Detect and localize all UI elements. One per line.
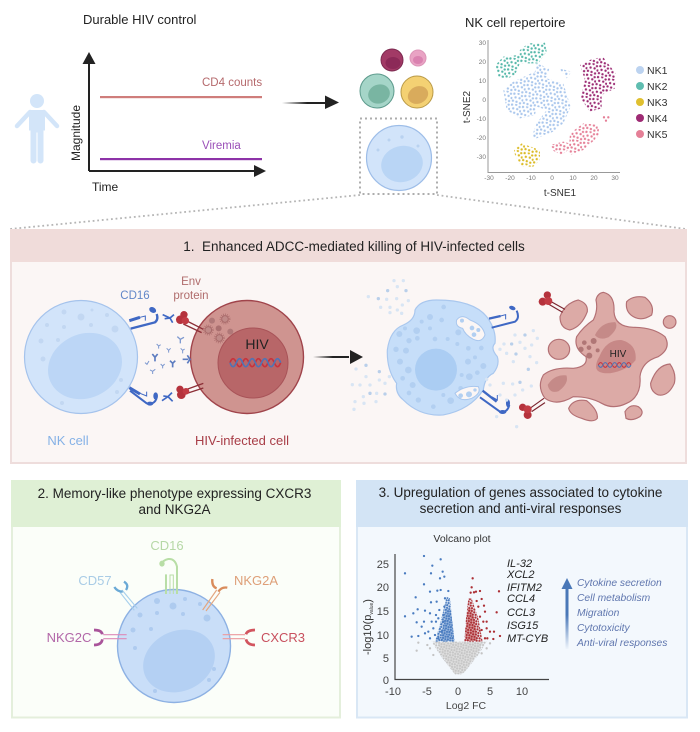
cell: NK cell bbox=[24, 300, 138, 414]
cell: lysed HIV-infected cell bbox=[540, 292, 676, 421]
label: NKG2C: NKG2C bbox=[47, 630, 91, 645]
chart: t-SNE scatter: -10 bbox=[526, 175, 536, 182]
arrow: killing progression bbox=[313, 350, 363, 364]
text block: upregulated pathways: Migration bbox=[577, 608, 620, 619]
chart: volcano plot: value bbox=[369, 602, 375, 615]
chart: volcano plot bbox=[362, 554, 549, 712]
cell: HIV-infected cell bbox=[190, 300, 304, 414]
chart: volcano plot: 10 bbox=[516, 686, 528, 698]
heading: NK cell repertoire: NK cell repertoire bbox=[465, 15, 565, 30]
panel 1: ADCC killing bbox=[10, 229, 687, 463]
zoom guide lines bbox=[10, 195, 686, 229]
chart: t-SNE scatter: 0 bbox=[482, 97, 486, 104]
chart: t-SNE scatter: 20 bbox=[590, 175, 598, 182]
chart: t-SNE scatter: -20 bbox=[505, 175, 515, 182]
chart: t-SNE scatter: -30 bbox=[484, 175, 494, 182]
chart: t-SNE scatter: 30 bbox=[611, 175, 619, 182]
chart: volcano plot: 10 bbox=[377, 630, 389, 642]
line chart: magnitude over time: CD4 counts bbox=[202, 77, 262, 89]
legend: NK clusters: NK2 bbox=[647, 81, 668, 93]
cell: NK cell with receptors bbox=[118, 590, 230, 704]
legend: NK clusters: NK1 bbox=[647, 65, 668, 77]
receptor: CD57 bbox=[114, 582, 137, 610]
heading: panel 2: and NKG2A bbox=[138, 502, 211, 517]
chart: volcano plot: -10 bbox=[385, 686, 401, 698]
text block: upregulated gene names bbox=[506, 558, 548, 645]
line chart: magnitude over time: Magnitude bbox=[69, 105, 83, 161]
chart: t-SNE scatter bbox=[462, 40, 620, 199]
chart: volcano plot: Log2 FC bbox=[446, 700, 487, 712]
text block: upregulated gene names: IL-32 bbox=[507, 558, 532, 570]
text: HIV label in nucleus: HIV bbox=[245, 336, 269, 352]
Env spikes bbox=[176, 311, 203, 399]
label: NK cell: NK cell bbox=[47, 433, 89, 448]
text block: upregulated gene names: ISG15 bbox=[507, 620, 539, 632]
panel 3: gene upregulation bbox=[356, 480, 688, 718]
icon: person bbox=[17, 94, 57, 164]
text block: upregulated pathways bbox=[576, 578, 667, 649]
chart: volcano plot: 15 bbox=[377, 606, 389, 618]
text block: upregulated gene names: IFITM2 bbox=[507, 582, 542, 594]
line chart: magnitude over time: Time bbox=[92, 180, 119, 194]
chart: t-SNE scatter: 10 bbox=[479, 78, 486, 85]
text block: upregulated pathways: Anti-viral responses bbox=[576, 638, 667, 649]
arrow: increasing expression bbox=[562, 578, 572, 649]
chart: volcano plot: 25 bbox=[377, 559, 389, 571]
chart: t-SNE scatter: t-SNE2 bbox=[462, 90, 473, 123]
label: CD16: CD16 bbox=[150, 538, 184, 553]
chart: t-SNE scatter: 20 bbox=[479, 59, 486, 66]
text: HIV label in lysed cell: HIV bbox=[610, 349, 627, 360]
icon: HIV DNA helix bbox=[230, 359, 281, 367]
receptors: Env spikes on lysed cell bbox=[519, 291, 565, 419]
chart: t-SNE scatter: -20 bbox=[477, 135, 486, 142]
chart: t-SNE scatter: -30 bbox=[477, 154, 486, 161]
receptors: CD16 with antibodies bound to Env bbox=[129, 306, 203, 406]
legend: NK clusters bbox=[636, 65, 668, 141]
label: HIV-infected cell: HIV-infected cell bbox=[195, 433, 289, 448]
chart: volcano plot: 20 bbox=[377, 582, 389, 594]
cell: degranulating NK cell bbox=[387, 300, 498, 415]
chart: volcano plot: 5 bbox=[487, 686, 493, 698]
top CD16 bbox=[129, 306, 174, 329]
heading: panel 3: secretion and anti-viral responses bbox=[420, 501, 622, 516]
heading: durable HIV control: Durable HIV control bbox=[83, 12, 197, 27]
panel 2: memory-like phenotype bbox=[11, 480, 341, 718]
receptor: CXCR3 bbox=[223, 630, 255, 645]
chart: volcano plot: -log10(p bbox=[362, 615, 374, 655]
chart: volcano plot: 0 bbox=[455, 686, 461, 698]
receptor: NKG2A bbox=[203, 579, 227, 611]
chart: volcano plot: ) bbox=[362, 599, 374, 603]
particles: released granules bbox=[352, 281, 537, 427]
label: CD57: CD57 bbox=[78, 573, 112, 588]
free antibodies bbox=[145, 337, 190, 374]
receptor: CD16 bbox=[159, 559, 177, 594]
receptor: NKG2C bbox=[94, 630, 127, 645]
heading: panel 1: 1. Enhanced ADCC-mediated killing of HIV-infected cells bbox=[183, 239, 525, 254]
panel 3 header bbox=[356, 480, 688, 527]
receptors: CD16 on degranulating NK cell bbox=[480, 305, 518, 414]
chart: volcano plot: 5 bbox=[383, 653, 389, 665]
label: CD16: CD16 bbox=[120, 290, 150, 302]
arrow: to NK cell repertoire bbox=[282, 96, 339, 109]
chart: t-SNE scatter: 10 bbox=[569, 175, 577, 182]
label: volcano plot title: Volcano plot bbox=[433, 533, 491, 545]
panel 1 header bbox=[10, 229, 687, 262]
icon: virus particles bbox=[204, 314, 233, 343]
text block: upregulated gene names: MT-CYB bbox=[507, 633, 548, 645]
chart: volcano plot: 0 bbox=[383, 675, 389, 687]
bottom CD16 bbox=[129, 388, 173, 406]
label: CXCR3: CXCR3 bbox=[261, 630, 305, 645]
chart: volcano plot: -5 bbox=[422, 686, 432, 698]
chart: t-SNE scatter: 30 bbox=[479, 40, 486, 47]
text block: upregulated gene names: XCL2 bbox=[506, 569, 535, 581]
icon: highlighted NK cell in dotted box bbox=[360, 118, 437, 194]
chart: t-SNE scatter: -10 bbox=[477, 116, 486, 123]
icon: NK cell subsets bbox=[360, 49, 433, 108]
text block: upregulated pathways: Cytotoxicity bbox=[577, 623, 630, 634]
heading: panel 2: 2. Memory-like phenotype expressing CXCR3 bbox=[38, 486, 311, 501]
label: Env protein: Env bbox=[181, 276, 201, 288]
text block: upregulated gene names: CCL4 bbox=[507, 593, 535, 605]
label: NKG2A: NKG2A bbox=[234, 573, 278, 588]
panel 2 header bbox=[11, 480, 341, 527]
legend: NK clusters: NK3 bbox=[647, 97, 668, 109]
text block: upregulated gene names: CCL3 bbox=[507, 607, 536, 619]
line chart: magnitude over time bbox=[69, 52, 266, 194]
legend: NK clusters: NK4 bbox=[647, 113, 668, 125]
icon: HIV DNA fragment bbox=[598, 363, 631, 367]
legend: NK clusters: NK5 bbox=[647, 129, 668, 141]
heading: panel 3: 3. Upregulation of genes associated to cytokine bbox=[379, 485, 662, 500]
line chart: magnitude over time: Viremia bbox=[202, 140, 241, 152]
label: Env protein: protein bbox=[173, 290, 209, 302]
text block: upregulated pathways: Cytokine secretion bbox=[577, 578, 662, 589]
text block: upregulated pathways: Cell metabolism bbox=[577, 593, 651, 604]
chart: t-SNE scatter: 0 bbox=[550, 175, 554, 182]
chart: t-SNE scatter: t-SNE1 bbox=[544, 188, 577, 199]
